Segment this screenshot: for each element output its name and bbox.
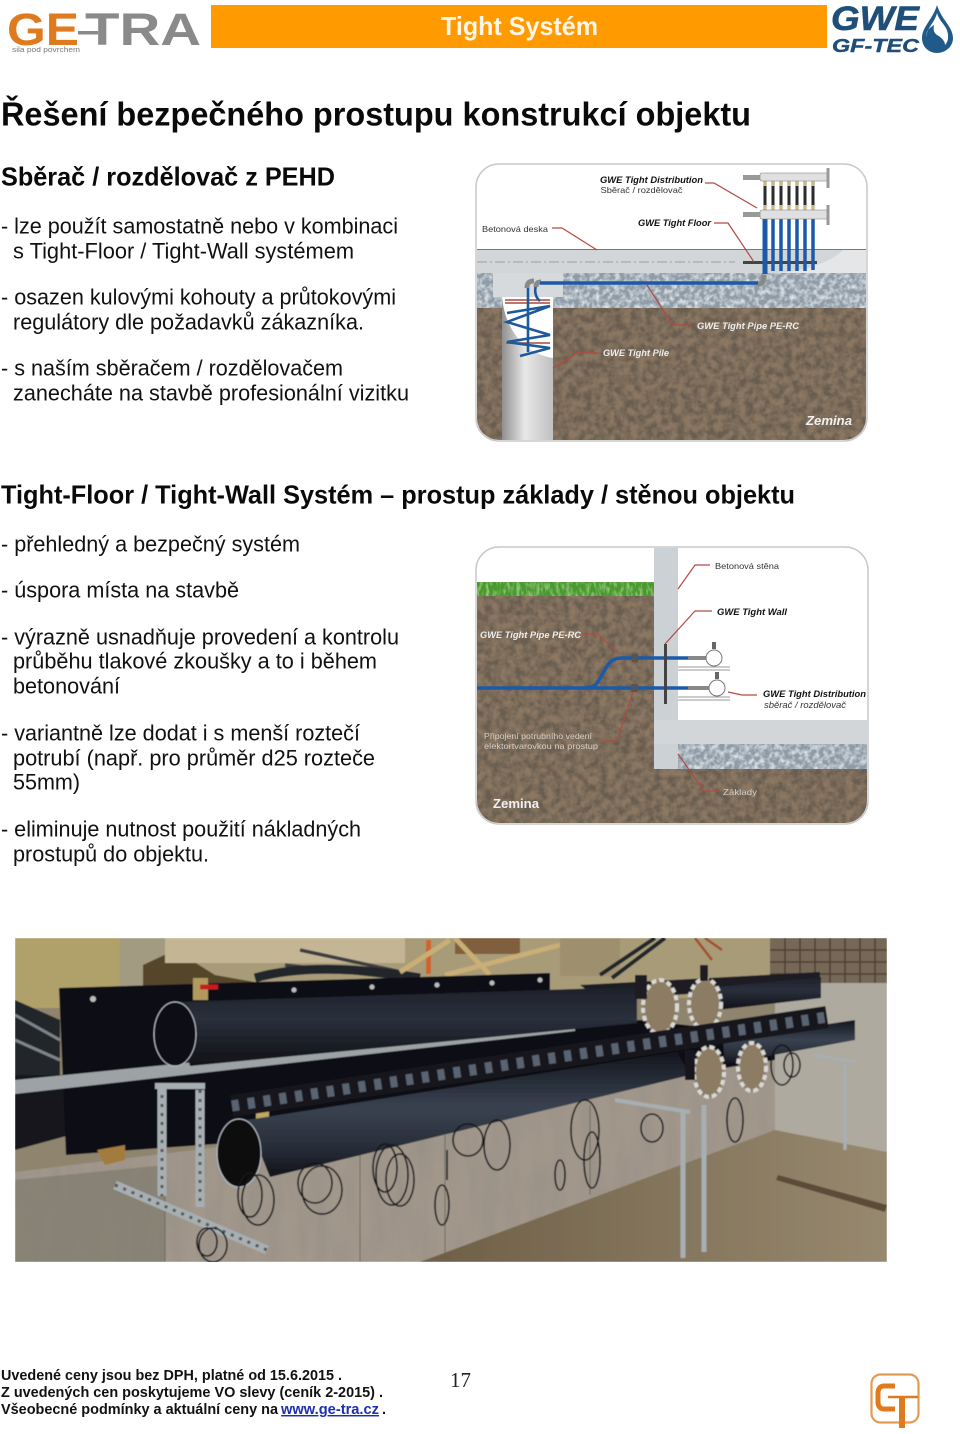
diagram labels: elektortvarovkou na prostup (484, 741, 598, 751)
text block: system benefits: průběhu tlakové zkoušky a to i během (13, 648, 377, 674)
text block: system benefits (1, 532, 399, 866)
supports (115, 1055, 855, 1258)
diagram labels (480, 561, 867, 811)
logo: GWE GF-TEC (831, 0, 953, 56)
diagram labels: GWE Tight Wall (717, 607, 788, 617)
concrete wall (15, 1060, 775, 1262)
diagram labels: Betonová deska (482, 224, 548, 234)
text block: collector benefits: - s naším sběračem / rozdělovačem (1, 356, 343, 380)
diagram labels: Betonová stěna (715, 561, 779, 571)
diagram labels (482, 175, 852, 428)
text block: collector benefits: - lze použít samostatně nebo v kombinaci (1, 214, 398, 238)
page number: 17 (450, 1368, 471, 1392)
heading: Sběrač / rozdělovač z PEHD: Sběrač / rozdělovač z PEHD (1, 162, 335, 192)
diagram labels: GWE Tight Pipe PE-RC (480, 630, 582, 640)
diagram labels: sběrač / rozdělovač (764, 700, 847, 710)
text block: collector benefits: s Tight-Floor / Tight-Wall systémem (13, 238, 354, 264)
footer text: . (382, 1402, 386, 1418)
diagram labels: Zemina (805, 413, 852, 428)
logo: GETRA (7, 4, 201, 55)
text block: collector benefits: regulátory dle požadavků zákazníka. (13, 310, 364, 334)
footer text: Uvedené ceny jsou bez DPH, platné od 15.6.2015 . (1, 1368, 342, 1384)
text block: system benefits: - výrazně usnadňuje provedení a kontrolu (1, 624, 399, 650)
gray rail (15, 1024, 575, 1094)
diagram labels: Základy (723, 787, 758, 797)
text block: system benefits: - variantně lze dodat i s menší roztečí (1, 720, 360, 746)
footer text: Všeobecné podmínky a aktuální ceny na (1, 1402, 279, 1418)
diagram labels: Zemina (493, 796, 540, 811)
upper pipe (175, 987, 637, 1066)
logo: GETRA: sila pod povrchem (12, 45, 80, 54)
diagram labels: Připojení potrubního vedení (484, 731, 593, 741)
panel: floor system diagram (476, 164, 867, 441)
text block: collector benefits: - osazen kulovými kohouty a průtokovými (1, 284, 396, 310)
logo: GETRA: TRA (85, 4, 201, 55)
text block: system benefits: - úspora místa na stavbě (1, 578, 239, 602)
footer text: Z uvedených cen poskytujeme VO slevy (ceník 2-2015) . (1, 1385, 383, 1401)
heading: Tight-Floor / Tight-Wall: Tight-Floor / Tight-Wall Systém – prostup základy / stěnou objektu (1, 480, 795, 510)
cable coils (197, 1045, 800, 1262)
panel: wall system diagram (476, 547, 868, 824)
text block: system benefits: betonování (13, 674, 120, 698)
text block: system benefits: prostupů do objektu. (13, 842, 209, 866)
diagram labels: GWE Tight Pipe PE-RC (697, 321, 800, 331)
footer text (1, 1368, 386, 1418)
footer text: www.ge-tra.cz (280, 1402, 379, 1418)
logo: GT mark (872, 1374, 918, 1428)
studs row (232, 1017, 827, 1106)
photo: manifold pipes on site (15, 938, 887, 1262)
diagram labels: Sběrač / rozdělovač (600, 185, 683, 195)
red valves (192, 977, 270, 1120)
text block: system benefits: - eliminuje nutnost použití nákladných (1, 816, 361, 842)
lower pipe (247, 1052, 690, 1177)
logo: GWE GF-TEC: GWE (831, 0, 920, 38)
text block: system benefits: 55mm) (13, 770, 80, 794)
back lower pipe (723, 1020, 855, 1064)
title: Řešení bezpečného prostupu konstrukcí objektu (1, 96, 751, 132)
logo: GWE GF-TEC: GF-TEC (832, 36, 920, 56)
text block: collector benefits (1, 214, 409, 406)
text block: system benefits: - přehledný a bezpečný systém (1, 532, 300, 556)
plate bolts (90, 978, 542, 1002)
header banner (211, 5, 827, 48)
text block: collector benefits: zanecháte na stavbě profesionální vizitku (13, 380, 409, 406)
diagram labels: GWE Tight Distribution (763, 689, 867, 699)
text block: system benefits: potrubí (např. pro průměr d25 rozteče (13, 746, 375, 770)
diagram labels: GWE Tight Distribution (600, 175, 704, 185)
diagram labels: GWE Tight Floor (638, 218, 712, 228)
diagram labels: GWE Tight Pile (603, 348, 669, 358)
header banner: Tight Systém (441, 11, 598, 41)
logo: GETRA: GE (7, 4, 79, 55)
